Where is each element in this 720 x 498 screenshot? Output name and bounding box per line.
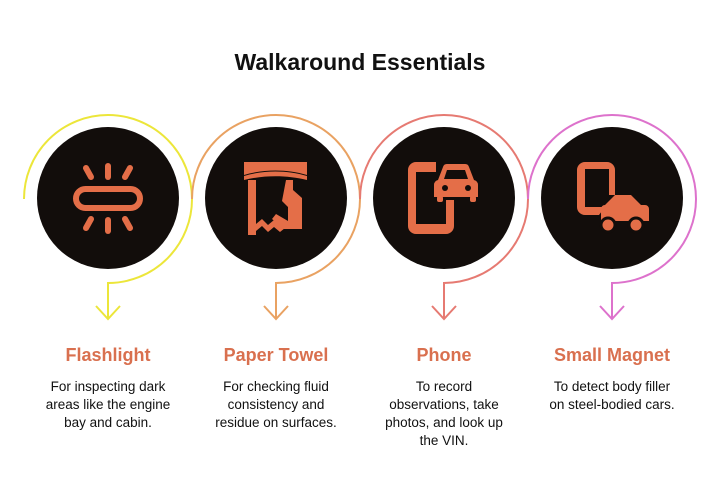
text block: For checking fluid — [223, 379, 329, 394]
text block: consistency and — [228, 397, 324, 412]
heading: Paper Towel — [224, 345, 328, 365]
panel: phone — [360, 115, 528, 448]
text block: For inspecting dark — [51, 379, 166, 394]
heading: Flashlight — [66, 345, 151, 365]
panel: paper towel — [192, 115, 360, 430]
panel: flashlight — [24, 115, 192, 430]
text block: To detect body filler — [554, 379, 671, 394]
text block: observations, take — [389, 397, 499, 412]
text block: the VIN. — [420, 433, 468, 448]
arrow: orange ring — [192, 115, 360, 319]
arrow: pink ring — [528, 115, 696, 319]
icon: flashlight — [37, 127, 179, 269]
arrow: salmon ring — [360, 115, 528, 319]
arrow: yellow ring — [24, 115, 192, 319]
heading: Small Magnet — [554, 345, 670, 365]
text block: To record — [416, 379, 472, 394]
panel: small magnet — [528, 115, 696, 412]
icon: phone with car — [373, 127, 515, 269]
title: Walkaround Essentials — [235, 49, 485, 75]
text block: bay and cabin. — [64, 415, 152, 430]
text block: residue on surfaces. — [215, 415, 337, 430]
icon: paper towel — [205, 127, 347, 269]
text block: photos, and look up — [385, 415, 503, 430]
text block: on steel-bodied cars. — [549, 397, 675, 412]
icon: magnet and car — [541, 127, 683, 269]
heading: Phone — [416, 345, 472, 365]
text block: areas like the engine — [46, 397, 170, 412]
